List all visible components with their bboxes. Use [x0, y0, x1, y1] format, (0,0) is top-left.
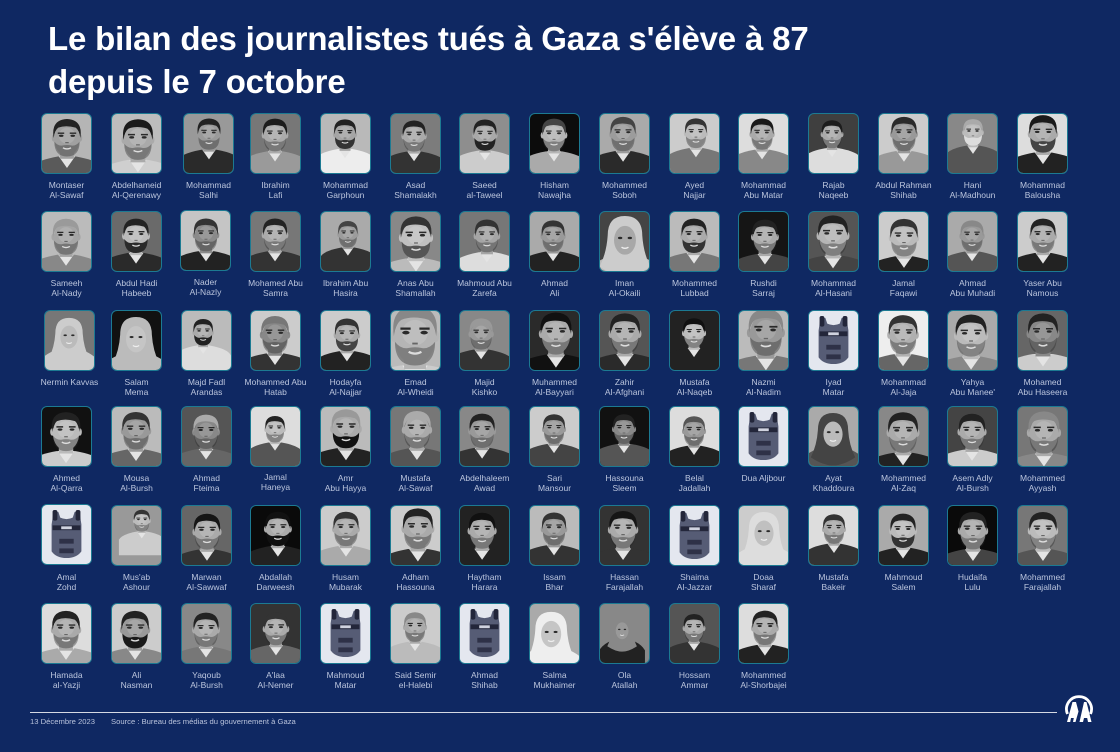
card: Nermin Kavvas: Nermin Kavvas — [41, 376, 98, 386]
card: Saeed al-Taweel: al-Taweel — [467, 190, 502, 200]
card: Yaser Abu Namous: Yaser Abu — [1023, 278, 1062, 288]
card: Amr Abu Hayya: Abu Hayya — [325, 483, 366, 493]
card: Ahmad Fteima — [181, 406, 232, 491]
card: Mustafa Al-Sawaf: Al-Sawaf — [398, 483, 432, 493]
card: Belal Jadallah: Jadallah — [679, 483, 710, 493]
card: Ola Atallah: Ola — [618, 670, 631, 680]
card: Sameeh Al-Nady: Sameeh — [51, 278, 82, 288]
card: Abdelhameid Al-Qerenawy: Abdelhameid — [112, 180, 161, 190]
card: Doaa Sharaf: Sharaf — [751, 582, 776, 592]
card: Majd Fadl Arandas: Majd Fadl — [188, 376, 225, 386]
card: Hudaifa Lulu — [947, 505, 998, 590]
card: Mohammed Al-Zaq: Al-Zaq — [891, 483, 916, 493]
card: Majd Fadl Arandas — [181, 310, 232, 397]
card: Mohammad Garphoun: Garphoun — [327, 190, 364, 200]
card: Muhammed Al-Bayyari: Muhammed — [532, 376, 577, 386]
card: Hassouna Sleem: Hassouna — [605, 472, 644, 482]
card: Ahmad Abu Muhadi: Ahmad — [959, 278, 986, 288]
card: Nader Al-Nazly: Al-Nazly — [190, 287, 221, 297]
card: Salam Mema: Salam — [124, 376, 149, 386]
card: Mohammed Al-Shorbajei — [738, 603, 789, 688]
card: Hani Al-Madhoun — [947, 113, 998, 200]
card: Mohammed Soboh: Mohammed — [602, 180, 647, 190]
card: Abdallah Darweesh: Abdallah — [259, 572, 292, 582]
card: Mohammad Al-Hasani: Al-Hasani — [815, 288, 852, 298]
card: Mohammed Abu Hatab: Hatab — [264, 387, 287, 397]
card: Mohammed Abu Hatab: Mohammed Abu — [245, 376, 306, 386]
card: Jamal Faqawi: Jamal — [892, 278, 915, 288]
card: Rushdi Sarraj — [738, 211, 789, 298]
card: Mahmoud Matar: Mahmoud — [327, 670, 364, 680]
card: Mohammed Abu Hatab — [245, 310, 306, 397]
card: Marwan Al-Sawwaf: Marwan — [191, 572, 222, 582]
card: Haytham Harara: Harara — [472, 582, 497, 592]
card: Hamada al-Yazji: al-Yazji — [53, 680, 80, 690]
card: Mohammed Al-Shorbajei: Mohammed — [741, 670, 786, 680]
card: Amr Abu Hayya — [320, 406, 371, 491]
card: Mahmoud Abu Zarefa — [457, 211, 512, 298]
card: Rajab Naqeeb: Naqeeb — [819, 190, 848, 200]
card: Mohammad Balousha: Mohammad — [1020, 180, 1065, 190]
card: Abdelhameid Al-Qerenawy — [111, 113, 162, 200]
card: Mahmoud Salem: Salem — [891, 582, 916, 592]
card: Abdelhaleem Awad — [459, 406, 510, 491]
card: Amal Zohd — [41, 504, 92, 589]
card: Mousa Al-Bursh: Al-Bursh — [120, 483, 153, 493]
card: Zahir Al-Afghani: Zahir — [615, 376, 634, 386]
card: Mohammad Salhi: Salhi — [199, 190, 218, 200]
card: Sari Mansour: Sari — [547, 472, 562, 482]
card: Issam Bhar: Bhar — [546, 582, 563, 592]
card: Rushdi Sarraj: Sarraj — [752, 288, 775, 298]
title: Le bilan des journalistes tués à Gaza s'élève à 87 — [48, 20, 809, 57]
card: Abdul Hadi Habeeb: Habeeb — [122, 288, 151, 298]
card: Abdul Rahman Shihab: Abdul Rahman — [875, 180, 932, 190]
card: Mohammed Soboh: Soboh — [612, 190, 637, 200]
card: Asad Shamalakh: Shamalakh — [394, 190, 437, 200]
card: Ibrahim Lafi: Ibrahim — [261, 180, 290, 190]
card: Ahmad Ali: Ahmad — [541, 278, 568, 288]
card: Hamada al-Yazji — [41, 603, 92, 688]
card: Hassan Farajallah: Farajallah — [606, 582, 643, 592]
card: Ola Atallah — [599, 603, 650, 688]
card: Hossam Ammar: Ammar — [681, 680, 708, 690]
card: Hossam Ammar: Hossam — [679, 670, 710, 680]
card: Sameeh Al-Nady: Al-Nady — [51, 288, 82, 298]
card: Salma Mukhaimer — [529, 603, 580, 688]
card: Ibrahim Lafi — [250, 113, 301, 200]
card: A'laa Al-Nemer: A'laa — [266, 670, 285, 680]
card: Mahmoud Matar: Matar — [335, 680, 356, 690]
card: Mohammad Balousha: Balousha — [1025, 190, 1060, 200]
card: Ahmad Shihab: Ahmad — [471, 670, 498, 680]
card: Marwan Al-Sawwaf — [181, 505, 232, 590]
card: Hassan Farajallah — [599, 505, 650, 590]
card: Hisham Nawajha: Nawajha — [538, 190, 571, 200]
card: Mohammed Al-Shorbajei: Al-Shorbajei — [740, 680, 787, 690]
card: Mustafa Al-Naqeb — [669, 310, 720, 395]
card: Amr Abu Hayya: Amr — [338, 472, 353, 482]
card: Nazmi Al-Nadim: Nazmi — [751, 376, 776, 386]
card: Mohammed Al-Zaq — [878, 406, 929, 491]
card: Asad Shamalakh: Asad — [406, 180, 425, 190]
card: Mohamed Abu Haseera: Abu Haseera — [1018, 387, 1067, 397]
card: Mohammed Lubbad — [669, 211, 720, 298]
card: Jamal Haneya: Haneya — [261, 482, 290, 492]
card: Salma Mukhaimer: Salma — [542, 670, 567, 680]
card: Mohammad Salhi — [183, 113, 234, 200]
card: Yaqoub Al-Bursh: Al-Bursh — [190, 680, 223, 690]
card: Hassouna Sleem: Sleem — [612, 483, 637, 493]
card: Husam Mubarak — [320, 505, 371, 590]
card: Ahmad Fteima: Fteima — [194, 483, 219, 493]
card: Yaser Abu Namous: Namous — [1027, 288, 1058, 298]
card: Jamal Faqawi: Faqawi — [890, 288, 917, 298]
card: Mousa Al-Bursh: Mousa — [124, 472, 149, 482]
card: Hodayfa Al-Najjar — [320, 310, 371, 397]
card: Ibrahim Abu Hasira: Ibrahim Abu — [323, 278, 368, 288]
card: Zahir Al-Afghani — [599, 310, 650, 397]
icon: AA logo — [1064, 693, 1094, 723]
card: Salam Mema — [111, 310, 162, 397]
card: Abdul Hadi Habeeb: Abdul Hadi — [116, 278, 157, 288]
card: Said Semir el-Halebi: el-Halebi — [399, 680, 432, 690]
card: Ibrahim Abu Hasira: Hasira — [333, 288, 358, 298]
card: Ahmed Al-Qarra: Al-Qarra — [50, 483, 83, 493]
card: Ahmad Abu Muhadi: Abu Muhadi — [950, 288, 995, 298]
card: Mus'ab Ashour: Ashour — [123, 582, 150, 592]
card: Nader Al-Nazly: Nader — [194, 276, 217, 286]
card: Mahmoud Salem: Mahmoud — [885, 572, 922, 582]
card: Mohammad Al-Jaja: Al-Jaja — [890, 387, 916, 397]
card: Belal Jadallah — [669, 406, 720, 491]
card: Hudaifa Lulu: Hudaifa — [958, 572, 987, 582]
card: Mohamed Abu Samra: Mohamed Abu — [248, 278, 303, 288]
card: Salam Mema: Mema — [125, 387, 148, 397]
card: Shaima Al-Jazzar: Al-Jazzar — [677, 582, 712, 592]
card: Ali Nasman: Ali — [132, 670, 141, 680]
card: Mustafa Al-Sawaf — [390, 406, 441, 491]
card: Ayat Khaddoura: Ayat — [825, 472, 842, 482]
card: Mohammad Al-Jaja: Mohammad — [881, 376, 926, 386]
card: Ahmad Abu Muhadi — [947, 211, 998, 298]
card: Hisham Nawajha: Hisham — [540, 180, 569, 190]
card: Said Semir el-Halebi: Said Semir — [395, 670, 436, 680]
title — [48, 20, 809, 100]
card: Mohammed Ayyash: Mohammed — [1020, 472, 1065, 482]
card: Yaser Abu Namous — [1017, 211, 1068, 298]
card: Majid Kishko: Majid — [474, 376, 495, 386]
card: Mohammed Farajallah: Farajallah — [1024, 582, 1061, 592]
card: Mustafa Al-Sawaf: Mustafa — [400, 472, 431, 482]
card: Mohammad Garphoun — [320, 113, 371, 200]
card: Abdul Hadi Habeeb — [111, 211, 162, 298]
card: Mohammad Abu Matar: Mohammad — [741, 180, 786, 190]
card: Ali Nasman — [111, 603, 162, 688]
card: Mustafa Bakeir: Bakeir — [821, 582, 846, 592]
title: depuis le 7 octobre — [48, 62, 346, 100]
card: Mohammad Al-Hasani — [808, 211, 859, 298]
card: Abdallah Darweesh: Darweesh — [256, 582, 295, 592]
card: Doaa Sharaf: Doaa — [753, 572, 774, 582]
card: Haytham Harara: Haytham — [467, 572, 502, 582]
card: Ahmed Al-Qarra — [41, 406, 92, 491]
card: Adham Hassouna: Hassouna — [396, 582, 435, 592]
card: Saeed al-Taweel — [459, 113, 510, 200]
card: Ahmad Ali: Ali — [550, 288, 559, 298]
card: Mohammed Lubbad: Lubbad — [680, 288, 709, 298]
card: Adham Hassouna: Adham — [402, 572, 429, 582]
card: Mohammed Soboh — [599, 113, 650, 200]
card: Iyad Matar — [808, 310, 859, 395]
card: Marwan Al-Sawwaf: Al-Sawwaf — [186, 582, 227, 592]
card: Nermin Kavvas — [41, 310, 98, 386]
card: Mohammed Farajallah — [1017, 505, 1068, 590]
card: Nazmi Al-Nadim — [738, 310, 789, 395]
card: Abdelhameid Al-Qerenawy: Al-Qerenawy — [112, 190, 161, 200]
card: Hodayfa Al-Najjar: Al-Najjar — [329, 387, 362, 397]
card: Ibrahim Lafi: Lafi — [269, 190, 282, 200]
card: Ahmad Shihab — [459, 603, 510, 688]
card: Ayat Khaddoura: Khaddoura — [813, 483, 854, 493]
card: Ali Nasman: Nasman — [121, 680, 152, 690]
card: Hamada al-Yazji: Hamada — [50, 670, 83, 680]
card: Anas Abu Shamallah: Shamallah — [395, 288, 436, 298]
card: Mahmoud Matar — [320, 603, 371, 688]
card: Sari Mansour — [529, 406, 580, 491]
card: Belal Jadallah: Belal — [685, 472, 704, 482]
card: Iman Al-Okaili: Al-Okaili — [609, 288, 640, 298]
card: Mohamed Abu Haseera — [1017, 310, 1068, 395]
card: Iyad Matar: Iyad — [825, 376, 842, 386]
card: Adham Hassouna — [390, 505, 441, 590]
card: Ahmad Fteima: Ahmad — [193, 472, 220, 482]
footer date: 13 Décembre 2023 — [30, 717, 95, 726]
card: Montaser Al-Sawaf — [41, 113, 92, 200]
card: Mohamed Abu Samra — [248, 211, 303, 298]
card: Emad Al-Wheidi — [390, 310, 441, 397]
card: Issam Bhar: Issam — [543, 572, 566, 582]
card: Hodayfa Al-Najjar: Hodayfa — [330, 376, 361, 386]
card: Abdul Rahman Shihab: Shihab — [890, 190, 917, 200]
card: Ahmad Ali — [529, 211, 580, 298]
footer source: Source : Bureau des médias du gouvernement à Gaza — [111, 717, 296, 726]
card: Nazmi Al-Nadim: Al-Nadim — [746, 387, 781, 397]
card: Mohammad Garphoun: Mohammad — [323, 180, 368, 190]
card: Jamal Haneya: Jamal — [264, 472, 287, 482]
card: Mus'ab Ashour: Mus'ab — [123, 572, 150, 582]
card: Rajab Naqeeb — [808, 113, 859, 200]
card: Mohammad Al-Jaja — [878, 310, 929, 395]
card: Mohammed Al-Zaq: Mohammed — [881, 472, 926, 482]
card: Yahya Abu Manee' — [947, 310, 998, 395]
card: Ahmed Al-Qarra: Ahmed — [53, 472, 80, 482]
card: Hani Al-Madhoun: Hani — [964, 180, 981, 190]
card: Ayed Najjar: Ayed — [685, 180, 704, 190]
card: Mohammad Salhi: Mohammad — [186, 180, 231, 190]
card: Ibrahim Abu Hasira — [320, 211, 371, 298]
card: Husam Mubarak: Mubarak — [329, 582, 362, 592]
card: Emad Al-Wheidi: Emad — [404, 376, 427, 386]
card: Muhammed Al-Bayyari: Al-Bayyari — [535, 387, 574, 397]
card: Rajab Naqeeb: Rajab — [822, 180, 845, 190]
card: Jamal Faqawi — [878, 211, 929, 298]
card: Ayat Khaddoura — [808, 406, 859, 491]
card: Emad Al-Wheidi: Al-Wheidi — [397, 387, 434, 397]
card: Said Semir el-Halebi — [390, 603, 441, 688]
card: Ayed Najjar — [669, 113, 720, 200]
card: Hani Al-Madhoun: Al-Madhoun — [950, 190, 995, 200]
card: Abdallah Darweesh — [250, 505, 301, 590]
card: Muhammed Al-Bayyari — [529, 310, 580, 397]
card: Haytham Harara — [459, 505, 510, 590]
card: Husam Mubarak: Husam — [332, 572, 359, 582]
card: Mus'ab Ashour — [111, 505, 162, 590]
card: Sameeh Al-Nady — [41, 211, 92, 298]
card: Dua Aljbour — [738, 406, 789, 491]
card: Shaima Al-Jazzar — [669, 505, 720, 590]
card: Mousa Al-Bursh — [111, 406, 162, 491]
card: Mohammad Abu Matar: Abu Matar — [744, 190, 783, 200]
card: Amal Zohd: Amal — [57, 572, 76, 582]
card: Mahmoud Abu Zarefa: Zarefa — [472, 288, 497, 298]
card: Yaqoub Al-Bursh — [181, 603, 232, 688]
card: Ola Atallah: Atallah — [612, 680, 638, 690]
card: Anas Abu Shamallah: Anas Abu — [397, 278, 434, 288]
card: Abdelhaleem Awad: Awad — [474, 483, 495, 493]
card: Mohammed Lubbad: Mohammed — [672, 278, 717, 288]
card: Anas Abu Shamallah — [390, 211, 441, 298]
card: Issam Bhar — [529, 505, 580, 590]
card: A'laa Al-Nemer — [250, 603, 301, 688]
card: Mustafa Bakeir — [808, 505, 859, 590]
card: Abdul Rahman Shihab — [875, 113, 932, 200]
card: Iyad Matar: Matar — [823, 387, 844, 397]
card: Mustafa Bakeir: Mustafa — [818, 572, 849, 582]
card: Mohamed Abu Samra: Samra — [263, 288, 288, 298]
card: Yahya Abu Manee': Yahya — [961, 376, 984, 386]
card: Mahmoud Salem — [878, 505, 929, 590]
card: Doaa Sharaf — [738, 505, 789, 590]
card: Hudaifa Lulu: Lulu — [964, 582, 981, 592]
card: Mohammed Ayyash — [1017, 406, 1068, 491]
card: Asad Shamalakh — [390, 113, 441, 200]
card: Asem Adly Al-Bursh: Al-Bursh — [956, 483, 989, 493]
card: Mohammad Balousha — [1017, 113, 1068, 200]
card: Yahya Abu Manee': Abu Manee' — [950, 387, 995, 397]
card: Salma Mukhaimer: Mukhaimer — [533, 680, 576, 690]
card: Asem Adly Al-Bursh: Asem Adly — [952, 472, 993, 482]
card: Montaser Al-Sawaf: Montaser — [49, 180, 84, 190]
card: Hassouna Sleem — [599, 406, 650, 491]
card: Jamal Haneya — [250, 406, 301, 491]
card: Hisham Nawajha — [529, 113, 580, 200]
card: Iman Al-Okaili: Iman — [615, 278, 634, 288]
card: Mohammad Al-Hasani: Mohammad — [811, 278, 856, 288]
card: Montaser Al-Sawaf: Al-Sawaf — [49, 190, 84, 200]
card: Zahir Al-Afghani: Al-Afghani — [605, 387, 644, 397]
card: Hassan Farajallah: Hassan — [610, 572, 639, 582]
card: Amal Zohd: Zohd — [57, 582, 76, 592]
card: Dua Aljbour: Dua Aljbour — [742, 472, 785, 482]
card: Mohamed Abu Haseera: Mohamed — [1024, 376, 1061, 386]
card: Ahmad Shihab: Shihab — [471, 680, 498, 690]
card: Abdelhaleem Awad: Abdelhaleem — [460, 472, 509, 482]
card: A'laa Al-Nemer: Al-Nemer — [258, 680, 293, 690]
card: Saeed al-Taweel: Saeed — [472, 180, 497, 190]
card: Hossam Ammar — [669, 603, 720, 688]
card: Mahmoud Abu Zarefa: Mahmoud Abu — [457, 278, 512, 288]
card: Nader Al-Nazly — [180, 210, 231, 297]
card: Mustafa Al-Naqeb: Mustafa — [679, 376, 710, 386]
card: Ayed Najjar: Najjar — [683, 190, 706, 200]
card: Majid Kishko — [459, 310, 510, 397]
card: Majid Kishko: Kishko — [472, 387, 497, 397]
card: Iman Al-Okaili — [599, 211, 650, 298]
card: Sari Mansour: Mansour — [538, 483, 571, 493]
card: Asem Adly Al-Bursh — [947, 406, 998, 491]
card: Mohammad Abu Matar — [738, 113, 789, 200]
card: Yaqoub Al-Bursh: Yaqoub — [192, 670, 221, 680]
card: Mohammed Ayyash: Ayyash — [1029, 483, 1056, 493]
card: Shaima Al-Jazzar: Shaima — [680, 572, 709, 582]
card: Mohammed Farajallah: Mohammed — [1020, 572, 1065, 582]
card: Majd Fadl Arandas: Arandas — [191, 387, 222, 397]
card: Rushdi Sarraj: Rushdi — [750, 278, 777, 288]
card: Mustafa Al-Naqeb: Al-Naqeb — [677, 387, 712, 397]
